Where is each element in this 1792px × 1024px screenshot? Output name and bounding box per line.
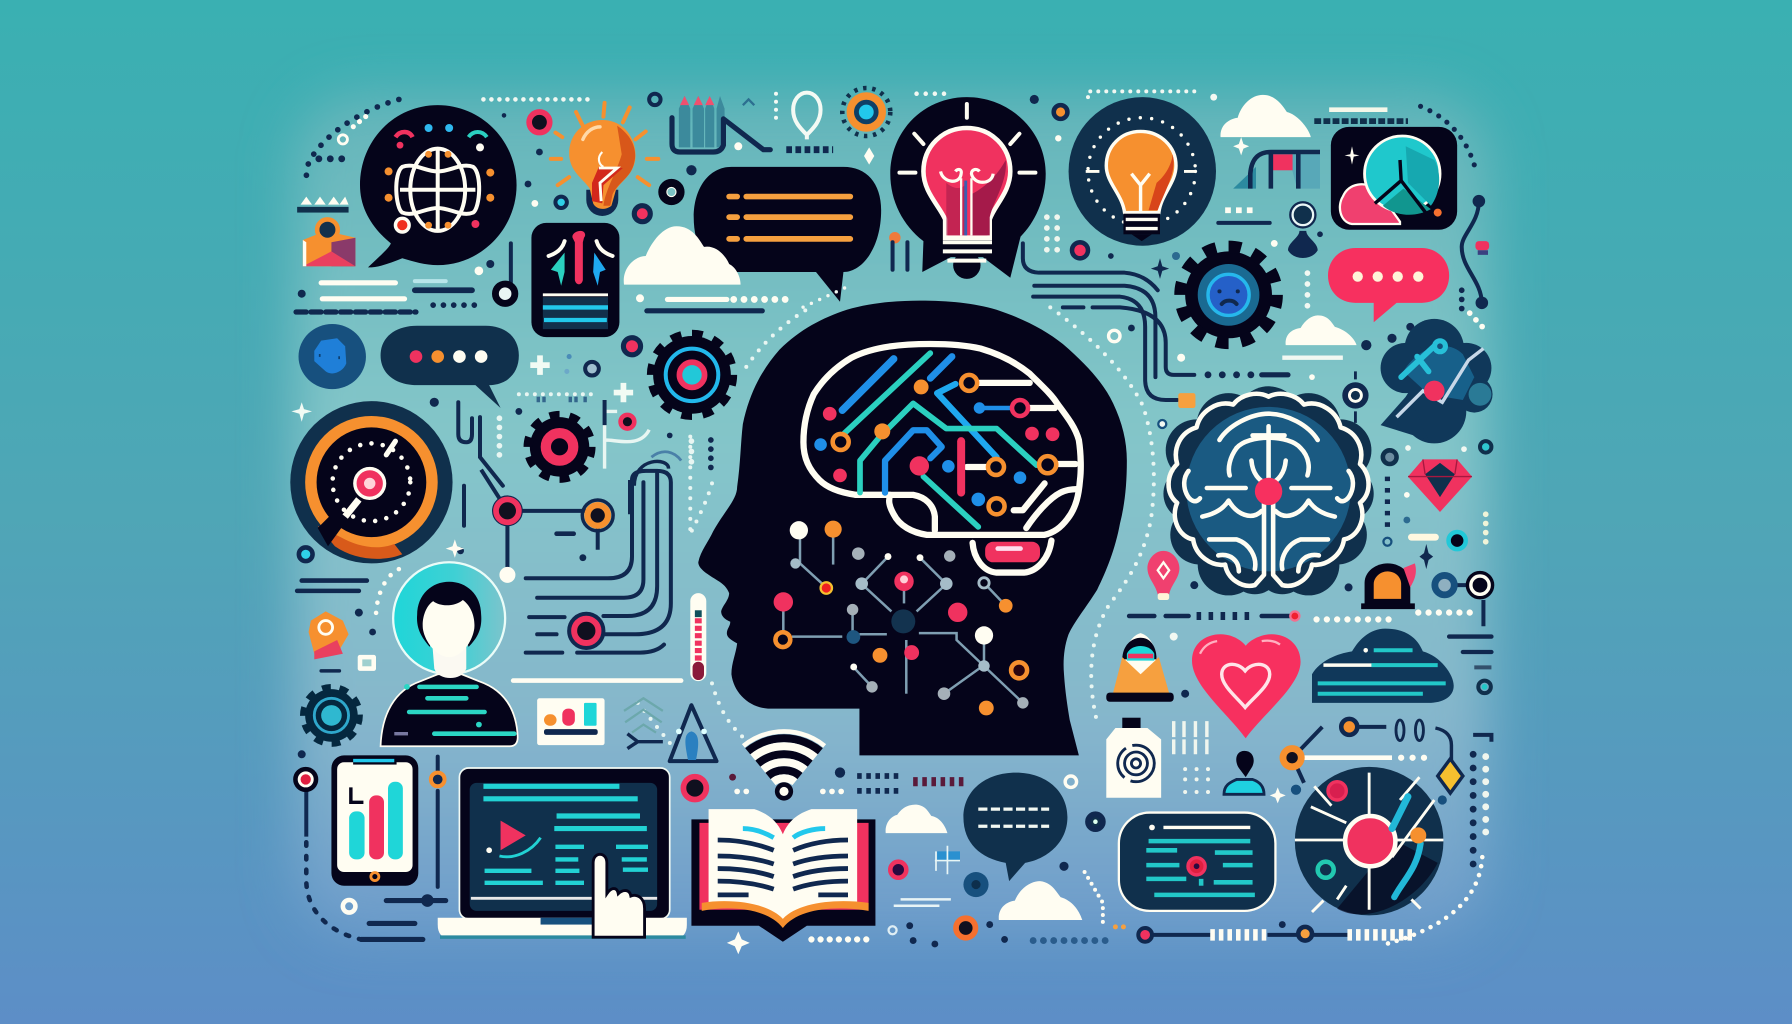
icon: phone bar chart [331,755,418,886]
arch icon [1361,563,1416,609]
white dash and dark dots [1282,323,1414,423]
lines with dots under bridge [1218,210,1323,247]
gear: blue face [1181,247,1277,343]
red node with bracket [605,400,711,514]
icon: orange bulb with rays [551,103,658,216]
bridge icon [1233,152,1320,189]
cloud 3 [999,881,1082,920]
left small items [297,547,399,635]
white dot grid [1185,769,1209,792]
open book [691,809,875,954]
icon: pencils [672,96,833,152]
red ring near book [683,767,845,800]
pink speech bubble [1328,248,1449,322]
dotted arcs around head [638,305,1154,749]
cloud 1 [624,226,741,285]
laptop with code and video [438,768,687,938]
rings near gear [519,338,641,402]
neural network inside head [774,521,1029,715]
hand pointer [593,854,645,937]
right side lines [1449,637,1491,693]
icon: orange badge [309,611,349,659]
arrow-like Y mark [627,734,663,749]
card: figures [531,223,619,337]
dark cloud with lines [1312,629,1454,703]
bottom chain [1113,924,1413,942]
s-curve connector [1462,195,1489,328]
gear: red ring [528,415,591,478]
icon: wifi arcs [742,729,826,801]
thermometer [690,593,706,681]
ring with stem [475,243,515,303]
head silhouette [698,301,1127,755]
long white line [513,679,681,683]
small bits right of gear [1047,217,1307,306]
maroon ticks [913,778,966,786]
cloud 2 [886,805,947,833]
faint chevrons [624,698,663,733]
circuit tube lines [526,471,671,653]
mini bar card [537,698,605,745]
right circuit wires [1023,243,1194,400]
big blue brain [1163,386,1374,595]
connected red and orange nodes [446,470,613,583]
brain circuit traces [842,353,1037,527]
top right lines and dots [1233,106,1477,174]
small person [1224,751,1286,803]
gear: cyan target [652,335,732,415]
radar hub [1295,767,1443,915]
white and dark lines under cloud [637,288,845,311]
icon: orange house pin [303,219,355,266]
gear: small cyan [304,688,359,743]
ring with dashed connector [295,751,446,939]
small rings cluster top [502,112,874,222]
keyhole ring [1288,203,1318,258]
small rings bottom [889,776,1109,947]
top-left dotted arc [305,99,399,183]
small white card [321,655,376,671]
plus marks and sparkle [291,355,633,422]
dial gauge [290,401,453,563]
small dots by red bulb [889,91,1217,270]
speech bubble: globe [360,105,517,267]
dark speech bubble with dots [381,326,519,408]
ruby gem [1408,459,1472,512]
right bottom connectors [1279,719,1491,945]
middle chain dashes [1129,611,1472,621]
icon: orange sun ring [842,88,890,136]
light rounded panel [295,94,1489,939]
dark card: cloud and pie [1331,127,1457,230]
orange tag and chain dots [1109,325,1288,428]
cloud small right [1286,315,1357,345]
cloud top right [1220,95,1311,137]
red map pin [1147,551,1353,600]
heart [1192,634,1301,738]
red ring node on tubes [569,614,603,648]
brain circuit nodes [814,375,1059,562]
bag with envelope [1106,633,1189,702]
icon: white map pin [776,93,821,139]
orange bulb in navy circle [1069,97,1216,246]
brain circuit outline [803,344,1081,573]
white dash stripes [1174,721,1207,754]
bottle with target [1106,718,1161,798]
small rings lower right [1383,441,1491,464]
face badge circle [299,324,366,389]
rounded code panel [1119,813,1275,911]
white bumps strip [297,197,349,213]
avatar person with code lines [381,562,518,746]
slider vertical [431,757,445,887]
left text lines [296,281,475,312]
dashed blocks by wifi [857,776,899,791]
icon: compass triangle [670,705,717,761]
red bulb in bubble [890,97,1046,279]
right ring connector [1383,477,1493,626]
speech bubble: orange lines [694,167,881,302]
small tube and dots left of gear [430,398,522,486]
dark chat bubble with dashes [963,773,1067,881]
top dotted row [483,94,661,105]
blue gem blob with key [1381,319,1493,443]
